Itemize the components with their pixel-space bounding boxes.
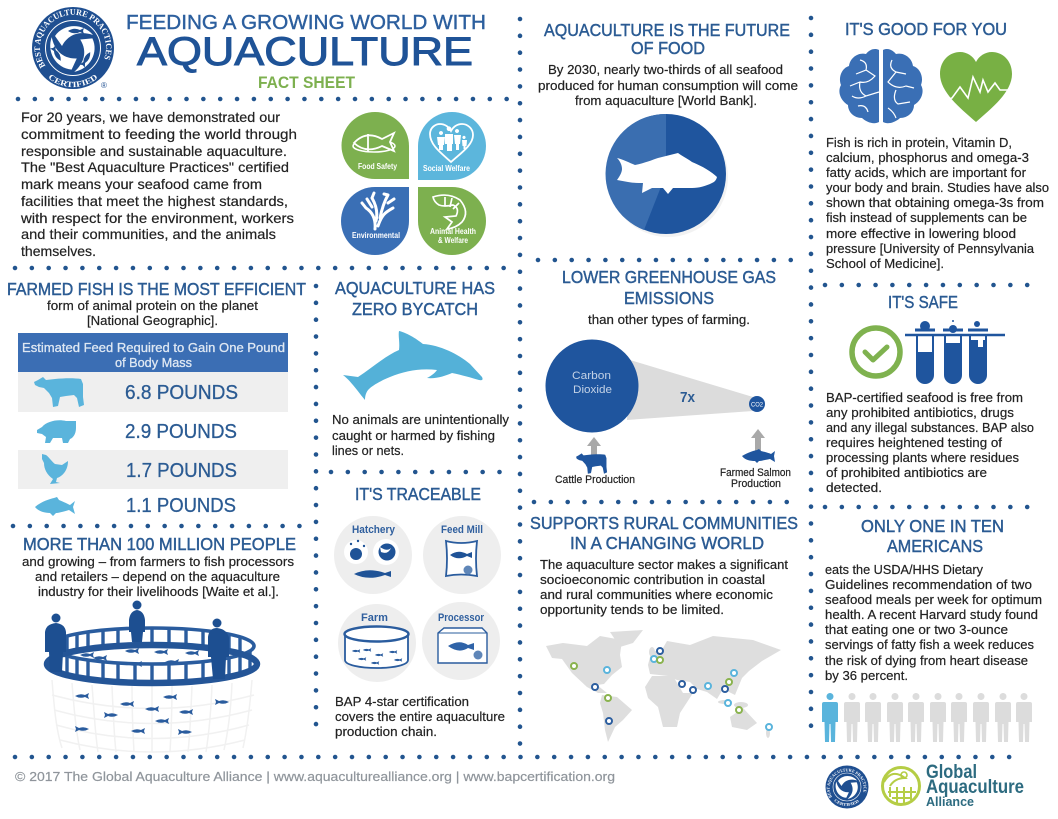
text block: produced for human consumption will come (538, 78, 798, 93)
text block: shown that obtaining omega-3s from (826, 195, 1044, 210)
text block (22, 554, 295, 599)
text block: and growing – from farmers to fish processors (22, 554, 295, 569)
text block: than other types of farming. (588, 312, 750, 327)
text block: fatty acids, which are important for (826, 165, 1027, 180)
text block: introduction: facilities that meet the highest standards, (21, 193, 288, 209)
text block: form of animal protein on the planet (47, 298, 258, 313)
row: cow: 6.8 POUNDS (125, 382, 238, 404)
icon: social welfare: Social Welfare (423, 164, 470, 173)
chart: emissions comparison: Carbon (572, 370, 611, 382)
chart: ten people pictogram (822, 693, 1032, 742)
heading (544, 20, 790, 58)
label: cattle: Cattle Production (555, 474, 635, 486)
footer: copyright: © 2017 The Global Aquaculture Alliance | www.aquaculturealliance.org | www.bapcertification.org (15, 769, 615, 784)
text block: covers the entire aquaculture (335, 709, 505, 724)
icon: processor (422, 602, 500, 680)
text block: requires heightened testing of (826, 435, 1002, 450)
panel: good for you (826, 19, 1049, 271)
text block: the risk of dying from heart disease (825, 653, 1028, 668)
icon: dolphin (343, 331, 483, 400)
arrow: salmon (751, 429, 765, 452)
text block: seafood meals per week for optimum (825, 592, 1042, 607)
logo: BAP small: BEST AQUACULTURE PRACTICES (826, 768, 866, 798)
icon: pig (37, 420, 76, 443)
text block: introduction (20, 109, 297, 259)
text block: and retailers – depend on the aquaculture (35, 569, 280, 584)
panel: future of food (538, 20, 798, 237)
text block: Guidelines recommendation of two (825, 577, 1032, 592)
icon: salmon (742, 449, 775, 463)
text block: By 2030, nearly two-thirds of all seafood (548, 62, 783, 77)
text block: processing plants where residues (826, 450, 1019, 465)
title (126, 12, 486, 92)
text block: by 36 percent. (825, 668, 908, 683)
panel: four pillars (341, 112, 486, 255)
icon: Best Aquaculture Practices logo: CERTIFIED (49, 75, 97, 88)
text block: caught or harmed by fishing (332, 428, 495, 443)
text block: lines or nets. (332, 443, 404, 458)
heading: ZERO BYCATCH (352, 299, 478, 319)
row: fish: 1.1 POUNDS (126, 495, 236, 517)
row: pig: 2.9 POUNDS (125, 421, 237, 443)
text block: production chain. (335, 724, 437, 739)
heading (530, 513, 798, 553)
logo: BAP small: CERTIFIED (834, 800, 859, 806)
text block (826, 135, 1049, 271)
text block (47, 298, 258, 328)
chart: emissions comparison (546, 340, 765, 432)
heading: AQUACULTURE HAS (335, 278, 495, 298)
icon: fish (35, 497, 75, 516)
text block: introduction: commitment to feeding the world through (21, 126, 297, 142)
label: salmon: Farmed Salmon (720, 467, 791, 479)
icon: heart with pulse (940, 52, 1012, 122)
text block: introduction: and their communities, and the animals (21, 226, 276, 242)
table: feed required (18, 333, 288, 517)
icon: farm: Farm (361, 612, 388, 624)
logo: Global Aquaculture Alliance: Global (926, 762, 977, 783)
icon: hatchery (334, 516, 412, 594)
chart: emissions comparison: CO2 (751, 402, 764, 408)
heading: IN A CHANGING WORLD (570, 533, 764, 553)
text block: more effective in lowering blood (826, 226, 1016, 241)
text block: introduction: The "Best Aquaculture Practices" certified (21, 159, 289, 175)
chart: emissions comparison: 7x (680, 389, 696, 406)
text block (332, 412, 510, 458)
panel: greenhouse gas (546, 267, 791, 490)
text block: introduction: with respect for the environment, workers (20, 210, 294, 226)
heading: SUPPORTS RURAL COMMUNITIES (530, 513, 798, 533)
text block: [National Geographic]. (87, 313, 218, 328)
text block: calcium, phosphorus and omega-3 (826, 150, 1029, 165)
heading: EMISSIONS (624, 288, 714, 308)
heading: FARMED FISH IS THE MOST EFFICIENT (7, 279, 306, 299)
text block: opportunity tends to be limited. (540, 602, 724, 617)
panel: one in ten (822, 516, 1042, 742)
text block: eats the USDA/HHS Dietary (825, 562, 983, 577)
label: salmon: Production (731, 478, 781, 490)
icon: food safety (342, 112, 409, 179)
icon: Best Aquaculture Practices logo: ® (101, 81, 107, 90)
title: FACT SHEET (258, 73, 356, 92)
icon: check mark (852, 328, 900, 376)
text block: and any illegal substances. BAP also (826, 420, 1034, 435)
text block (538, 62, 798, 108)
text block: introduction: themselves. (21, 243, 96, 259)
text block: from aquaculture [World Bank]. (575, 93, 757, 108)
icon: social welfare (418, 112, 486, 180)
text block: of prohibited antibiotics are (826, 465, 987, 480)
text block: introduction: For 20 years, we have demonstrated our (21, 109, 280, 125)
heading: OF FOOD (631, 38, 705, 58)
text block: detected. (826, 480, 882, 495)
icon: hatchery: Hatchery (352, 524, 396, 536)
icon: animal health and welfare (418, 187, 486, 255)
heading: IT'S SAFE (888, 292, 958, 312)
text block: industry for their livelihoods [Waite et al.]. (38, 584, 279, 599)
text block: School of Medicine]. (826, 256, 944, 271)
text block: fish instead of supplements can be (826, 210, 1027, 225)
title: FEEDING A GROWING WORLD WITH (126, 12, 486, 34)
icon: animal health and welfare: Animal Health (430, 227, 476, 236)
icon: environmental: Environmental (352, 231, 400, 240)
text block: your body and brain. Studies have also (826, 180, 1049, 195)
heading: LOWER GREENHOUSE GAS (562, 267, 776, 287)
heading: IT'S TRACEABLE (355, 484, 481, 504)
text block: Fish is rich in protein, Vitamin D, (826, 135, 1012, 150)
heading (861, 516, 1004, 556)
text block: that eating one or two 3-ounce (825, 622, 1008, 637)
heading: AMERICANS (887, 536, 983, 556)
icon: feed mill: Feed Mill (441, 524, 483, 536)
text block (825, 562, 1042, 683)
text block: any prohibited antibiotics, drugs (826, 405, 1015, 420)
icon: animal health and welfare: & Welfare (438, 236, 468, 245)
heading: ONLY ONE IN TEN (861, 516, 1004, 536)
icon: cow (34, 377, 84, 407)
panel: rural communities (530, 513, 798, 742)
chart: world map with pins (546, 630, 781, 742)
panel: livelihoods (22, 534, 296, 752)
label: salmon (720, 467, 791, 490)
icon: cattle (576, 453, 607, 474)
text block: socioeconomic contribution in coastal (540, 572, 765, 587)
text block: No animals are unintentionally (332, 412, 510, 427)
icon: feed mill (423, 516, 501, 594)
text block: introduction: mark means your seafood came from (21, 176, 262, 192)
text block (335, 694, 505, 739)
title: AQUACULTURE (137, 30, 473, 74)
icon: processor: Processor (438, 612, 485, 624)
text block: pressure [University of Pennsylvania (826, 241, 1035, 256)
text block: and rural communities where economic (540, 587, 774, 602)
chart: emissions comparison: Dioxide (573, 384, 612, 396)
heading (562, 267, 776, 308)
panel: zero bycatch (332, 278, 510, 458)
arrow: cattle (587, 437, 601, 458)
heading: MORE THAN 100 MILLION PEOPLE (23, 534, 296, 554)
logo: Global Aquaculture Alliance (882, 762, 1024, 809)
chart: two-thirds pie with fish (606, 114, 728, 237)
text block (826, 390, 1034, 495)
text block: BAP-certified seafood is free from (826, 390, 1023, 405)
icon: brain (839, 49, 923, 123)
heading (335, 278, 495, 319)
text block: introduction: responsible and sustainable aquaculture. (21, 143, 287, 159)
icon: test tubes (905, 320, 1005, 383)
row: chicken: 1.7 POUNDS (126, 460, 237, 482)
logo: Global Aquaculture Alliance: Alliance (926, 794, 974, 809)
table: feed required: of Body Mass (115, 355, 192, 370)
logo: Global Aquaculture Alliance: Aquaculture (926, 777, 1024, 798)
panel: traceable (334, 484, 505, 739)
text block: health. A recent Harvard study found (825, 607, 1038, 622)
text block (540, 557, 788, 617)
icon: food safety: Food Safety (358, 162, 397, 171)
text block: The aquaculture sector makes a significant (540, 557, 788, 572)
icon: environmental (341, 187, 409, 255)
panel: safe (826, 292, 1034, 495)
icon: chicken (42, 454, 68, 484)
panel: most efficient protein (7, 279, 306, 517)
icon: Best Aquaculture Practices logo: BEST AQUACULTURE PRACTICES (34, 9, 112, 69)
text block: servings of fatty fish a week reduces (825, 637, 1034, 652)
heading: IT'S GOOD FOR YOU (845, 19, 1007, 39)
icon: farm (338, 604, 416, 682)
table: feed required: Estimated Feed Required to Gain One Pound (22, 340, 285, 355)
heading: AQUACULTURE IS THE FUTURE (544, 20, 790, 40)
illustration: fish farm net pen (45, 600, 257, 752)
text block: BAP 4-star certification (335, 694, 469, 709)
